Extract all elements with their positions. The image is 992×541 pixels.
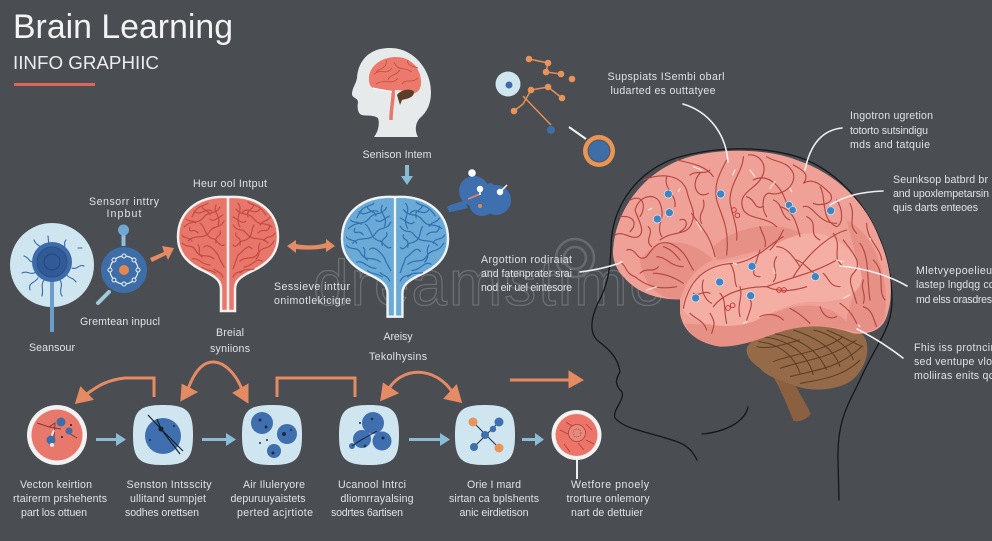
step 1 arrow xyxy=(96,433,126,446)
label: array techniques: Areisy xyxy=(384,331,413,343)
caption 2: Senston Intsscity xyxy=(126,479,212,491)
blue markers xyxy=(653,190,835,302)
bracket connector xyxy=(277,378,355,397)
step 4 icon xyxy=(339,405,399,465)
caption 1: Vecton keirtion xyxy=(20,479,92,491)
caption 4 xyxy=(331,479,414,519)
annotation: left of main brain: Argottion rodiraiat xyxy=(481,254,572,266)
step 2 icon xyxy=(133,405,193,465)
annotation: right middle: md elss orasdres xyxy=(916,294,992,306)
caption 5 xyxy=(449,479,539,519)
folds xyxy=(615,155,885,333)
caption 3: depuruuyaistets xyxy=(230,493,306,505)
caption 6 xyxy=(566,479,650,519)
label: sensory intake: Senison Intem xyxy=(362,149,432,161)
annotation: lower right: sed ventupe vlo xyxy=(914,356,992,368)
arrow: down to blue brain xyxy=(401,165,413,185)
caption 2: ullitand sumpjet xyxy=(130,493,206,505)
step captions xyxy=(13,479,650,519)
icon: red brain xyxy=(178,197,278,311)
caption 1 xyxy=(13,479,107,519)
step 6 icon xyxy=(552,410,602,479)
caption 5: Orie I mard xyxy=(467,479,521,491)
caption 3: perted acjrtiote xyxy=(237,507,313,519)
step 5 icon xyxy=(455,405,515,465)
arrow: network to ring xyxy=(569,127,586,139)
caption 4: Ucanool Intrci xyxy=(338,479,406,491)
icon: orange ring xyxy=(583,135,615,167)
label: brain synapses xyxy=(210,327,250,355)
orange cycle arrows xyxy=(77,362,581,402)
icon: orange network xyxy=(496,56,575,134)
caption 1: part los ottuen xyxy=(21,507,87,519)
annotation: upper right 2: Seunksop batbrd br xyxy=(893,174,988,186)
annotation: top of main brain xyxy=(608,71,724,97)
label: sensitive information: onimotlekicigre xyxy=(274,295,351,307)
arrow: input to red brain xyxy=(150,246,174,262)
label: brain synapses: Breial xyxy=(216,327,244,339)
caption 5: anic eirdietison xyxy=(460,507,529,519)
watermark: dreamstime xyxy=(313,247,665,319)
arrow: loop between fourth and fifth xyxy=(382,372,460,401)
icon: head profile with brain xyxy=(352,48,431,137)
step 3 icon xyxy=(242,405,302,465)
annotation: right middle xyxy=(916,265,992,306)
label: sensory input: Sensorr inttry xyxy=(89,196,160,208)
annotation: top of main brain: ludarted es outtatyee xyxy=(610,85,716,97)
icon: blue brain xyxy=(342,197,448,317)
subtitle: IINFO GRAPHIIC xyxy=(13,52,159,73)
label: sensory input xyxy=(89,196,160,220)
step 5 arrow xyxy=(522,433,544,446)
annotation: lower right: moliiras enits qc xyxy=(914,370,992,382)
icon: sensory input node xyxy=(98,224,147,303)
annotation: upper right 1: totorto sutsindigu xyxy=(850,125,928,137)
annotation: left of main brain: and fatenprater srai xyxy=(481,268,572,280)
caption 6: nart de dettuier xyxy=(571,507,643,519)
label: sensor: Seansour xyxy=(29,342,75,354)
temporal lobe highlight xyxy=(682,233,862,326)
annotation: left of main brain xyxy=(481,254,572,294)
caption 3 xyxy=(230,479,313,519)
cerebrum xyxy=(613,151,891,347)
label: brain synapses: syniions xyxy=(210,343,250,355)
annotation: lower right: Fhis iss protncir xyxy=(914,342,992,354)
head outline xyxy=(592,149,892,500)
caption 5: sirtan ca bplshents xyxy=(449,493,539,505)
annotation: upper right 1: Ingotron ugretion xyxy=(850,110,933,122)
leader lines xyxy=(580,104,907,358)
title: Brain Learning xyxy=(13,8,233,46)
caption 6: Wetfore pnoely xyxy=(571,479,650,491)
label: sensitive information: Sessieve inttur xyxy=(274,281,350,293)
annotation: left of main brain: nod eir uel eintesore xyxy=(481,282,572,294)
shading xyxy=(640,220,886,347)
icon: blue protein blob xyxy=(447,169,511,216)
caption 4: dliomrrayalsing xyxy=(340,493,414,505)
step 2 arrow xyxy=(202,433,236,446)
caption 1: rtairerm prshehents xyxy=(13,493,107,505)
title underline xyxy=(14,83,95,86)
red marker chains xyxy=(726,208,786,310)
label: array techniques xyxy=(369,331,427,363)
label: german input: Gremtean inpucl xyxy=(80,316,160,328)
cerebellum and stem xyxy=(747,326,867,421)
arrow: return to first icon xyxy=(77,378,154,402)
caption 2 xyxy=(125,479,212,519)
label: neural input: Heur ool Intput xyxy=(193,178,267,190)
caption 4: sodrtes 6artisen xyxy=(331,507,403,519)
annotation: lower right xyxy=(914,342,992,382)
caption 6: trorture onlemory xyxy=(566,493,650,505)
white flecks xyxy=(647,167,871,327)
step 1 icon xyxy=(27,405,87,465)
title block xyxy=(13,8,233,86)
annotation: upper right 2 xyxy=(893,174,989,214)
annotation: upper right 2: and upoxlempetarsin xyxy=(893,188,989,200)
caption 3: Air Iluleryore xyxy=(243,479,305,491)
label: sensory input: Inpbut xyxy=(106,208,142,220)
icon: sensory neuron xyxy=(10,223,94,332)
main brain xyxy=(613,151,891,421)
caption 2: sodhes orettsen xyxy=(125,507,199,519)
annotation: upper right 1 xyxy=(850,110,933,151)
arrow: loop between second and third xyxy=(182,362,247,401)
label: sensitive information xyxy=(274,281,351,307)
arrow: toward head xyxy=(510,373,581,386)
double arrow between brains xyxy=(287,239,335,253)
step 4 arrow xyxy=(409,433,450,446)
label: array techniques: Tekolhysins xyxy=(369,351,427,363)
annotation: upper right 1: mds and tatquie xyxy=(850,139,930,151)
annotation: right middle: lastep lngdqg cc xyxy=(916,279,992,291)
annotation: upper right 2: quis darts enteoes xyxy=(893,202,978,214)
annotation: top of main brain: Supspiats ISembi obarl xyxy=(608,71,724,83)
